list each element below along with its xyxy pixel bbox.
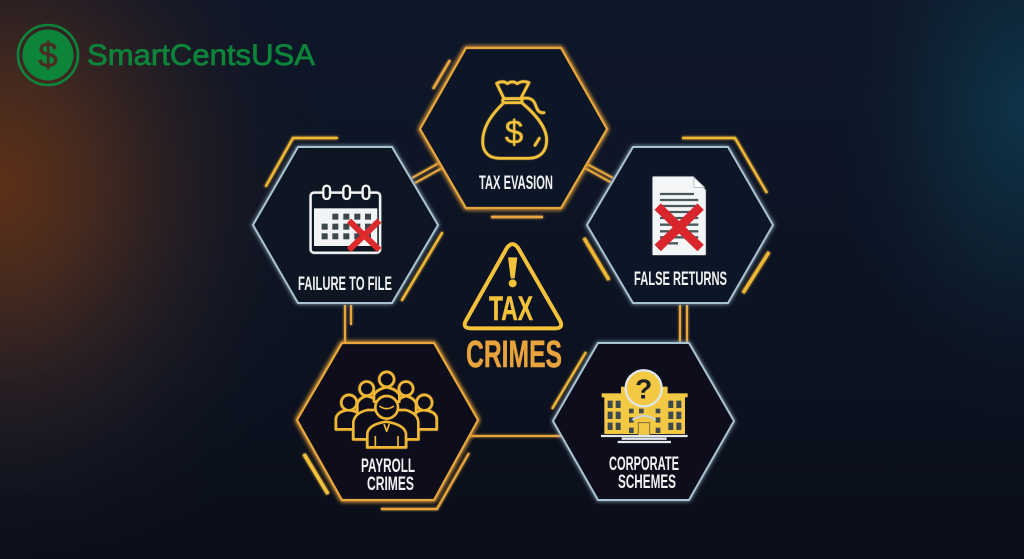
icon: document with red cross bbox=[653, 177, 706, 255]
icon: dollar coin: $ bbox=[38, 36, 58, 75]
logo wordmark: SmartCentsUSA bbox=[87, 39, 315, 72]
hexagon outline: failure to file bbox=[253, 147, 438, 303]
panel: failure to file bbox=[253, 138, 442, 303]
label: payroll crimes bbox=[361, 456, 415, 495]
label: corporate schemes bbox=[609, 454, 679, 493]
heading: tax: TAX bbox=[489, 290, 533, 328]
label: corporate schemes: CORPORATE bbox=[609, 454, 679, 475]
panel: tax evasion bbox=[420, 48, 607, 217]
icon: building with question mark bbox=[601, 370, 688, 442]
logo: SmartCentsUSA bbox=[18, 25, 315, 85]
accent bar: corporate schemes bbox=[608, 508, 653, 512]
icon: building with question mark: ? bbox=[635, 374, 652, 405]
hexagon outline: false returns bbox=[587, 147, 773, 303]
accent lines: failure to file bbox=[266, 138, 442, 300]
center: tax crimes warning bbox=[465, 244, 562, 376]
accent bars: tax evasion bbox=[433, 60, 543, 217]
accent bar: payroll crimes bbox=[304, 454, 328, 494]
panel: false returns bbox=[584, 138, 773, 303]
accent line: payroll crimes bbox=[381, 453, 469, 509]
hexagon outline: corporate schemes bbox=[553, 343, 734, 500]
accent lines: false returns bbox=[682, 138, 767, 193]
heading: crimes: CRIMES bbox=[466, 334, 562, 376]
panel: payroll crimes bbox=[297, 343, 478, 509]
label: failure to file: FAILURE TO FILE bbox=[298, 274, 392, 295]
accent bars: false returns bbox=[584, 238, 769, 293]
accent line: corporate schemes bbox=[552, 352, 586, 409]
label: payroll crimes: CRIMES bbox=[367, 474, 414, 495]
label: tax evasion: TAX EVASION bbox=[479, 173, 553, 194]
panel: corporate schemes bbox=[552, 343, 734, 510]
label: payroll crimes: PAYROLL bbox=[361, 456, 415, 477]
label: corporate schemes: SCHEMES bbox=[618, 472, 676, 493]
icon: money bag bbox=[483, 82, 547, 158]
label: false returns: FALSE RETURNS bbox=[634, 269, 727, 290]
icon: group of people bbox=[336, 372, 437, 447]
icon: warning triangle bbox=[465, 244, 561, 328]
icon: money bag: $ bbox=[505, 114, 523, 151]
icon: calendar with red cross bbox=[311, 186, 380, 253]
hexagon outline: tax evasion bbox=[420, 48, 607, 208]
connectors between hexagons bbox=[345, 163, 687, 436]
hexagon outline: payroll crimes bbox=[297, 343, 478, 500]
icon: dollar coin bbox=[18, 25, 78, 85]
